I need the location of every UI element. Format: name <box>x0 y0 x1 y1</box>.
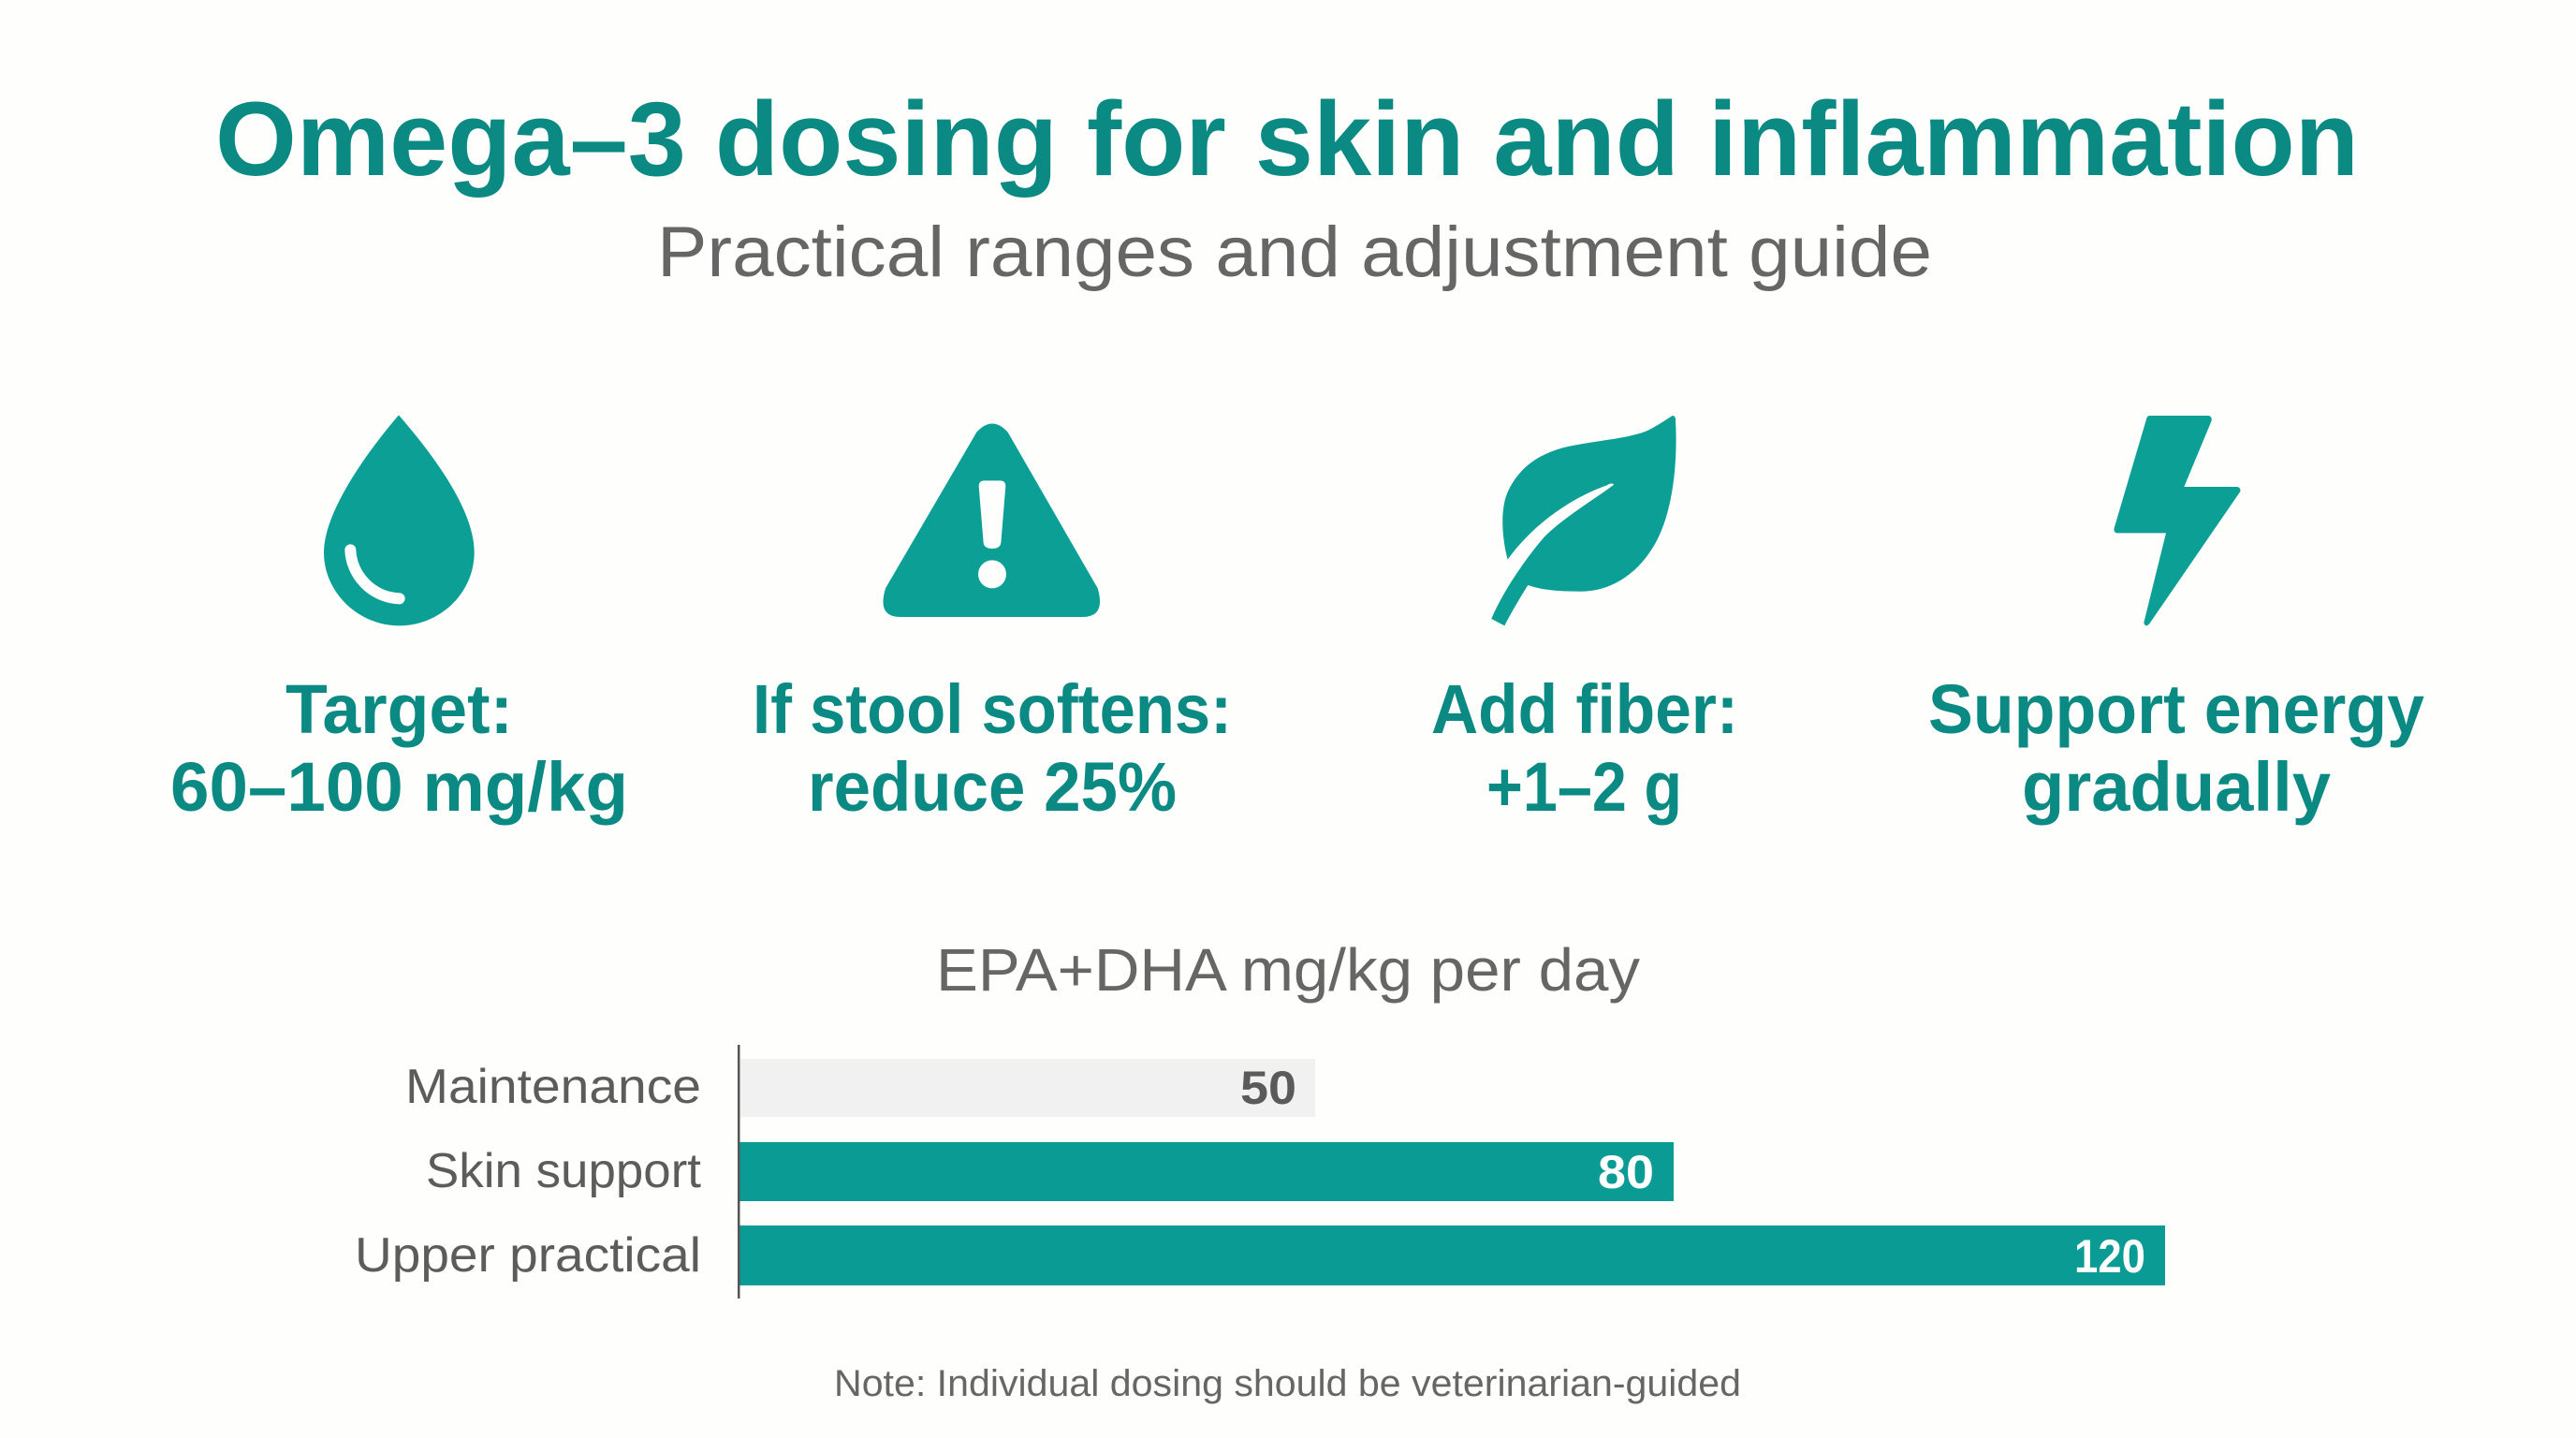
label: fiber <box>1431 670 1738 826</box>
panel: energy <box>1928 416 2424 826</box>
bar: skin support: Skin support <box>426 1144 702 1198</box>
label: energy: Support energy <box>1928 670 2424 748</box>
bar: upper practical: 120 <box>2074 1230 2145 1283</box>
bar chart <box>355 936 2165 1299</box>
label: fiber: +1–2 g <box>1486 748 1682 826</box>
label: target <box>170 670 628 826</box>
icon: leaf <box>1491 416 1676 625</box>
icon: lightning bolt <box>2114 416 2240 625</box>
title: Omega–3 dosing for skin and inflammation <box>215 81 2359 198</box>
label: energy <box>1928 670 2424 826</box>
label: stool: reduce 25% <box>808 748 1177 826</box>
bar: maintenance: 50 <box>1240 1062 1296 1114</box>
label: stool <box>753 670 1232 826</box>
bar: maintenance <box>405 1059 1315 1117</box>
chart title: EPA+DHA mg/kg per day <box>936 936 1640 1004</box>
label: energy: gradually <box>2022 748 2331 826</box>
axis <box>738 1045 739 1299</box>
panel: target <box>170 415 628 826</box>
bar: maintenance: Maintenance <box>405 1060 701 1114</box>
label: fiber: Add fiber: <box>1431 670 1738 748</box>
bar: skin support: 80 <box>1598 1146 1654 1198</box>
icon: warning triangle <box>883 423 1100 617</box>
label: stool: If stool softens: <box>753 670 1232 748</box>
panel: fiber <box>1431 416 1738 826</box>
panel: stool <box>753 423 1232 826</box>
icon: water drop <box>324 415 475 625</box>
subtitle: Practical ranges and adjustment guide <box>657 213 1932 292</box>
note: Note: Individual dosing should be veterinarian-guided <box>834 1363 1741 1404</box>
label: target: Target: <box>285 670 513 748</box>
label: target: 60–100 mg/kg <box>170 748 628 826</box>
bar: skin support <box>426 1142 1674 1201</box>
bar: upper practical: Upper practical <box>355 1228 701 1283</box>
bar: upper practical <box>355 1225 2165 1285</box>
